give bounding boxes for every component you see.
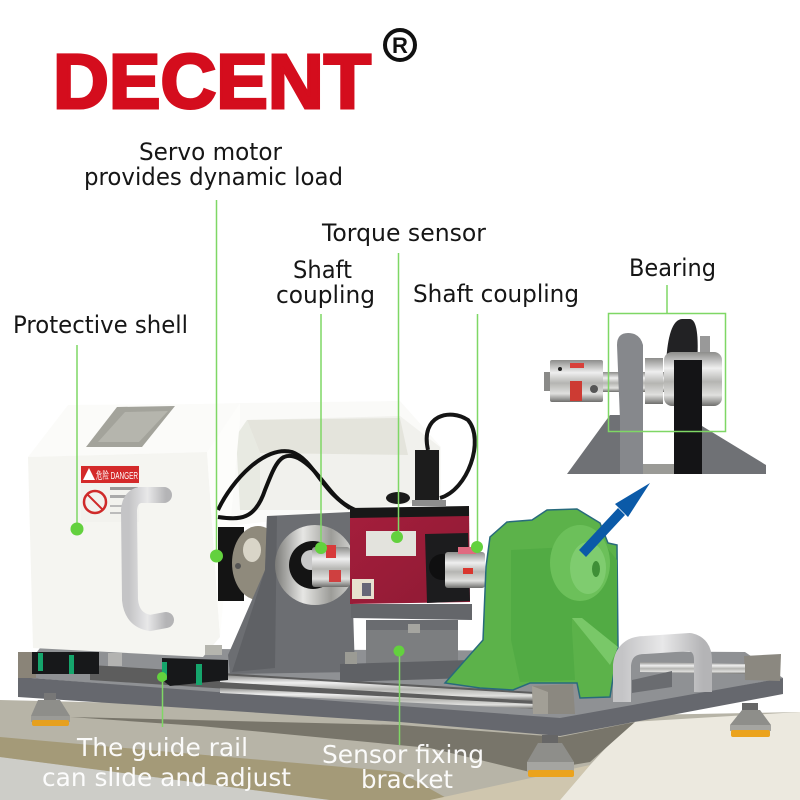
label: servo motor: Servo motor bbox=[139, 138, 282, 166]
flange bbox=[275, 525, 355, 605]
bearing leader and box bbox=[608, 285, 726, 432]
blue arrow bbox=[579, 483, 650, 557]
protective shell bbox=[28, 403, 240, 657]
torque sensor body bbox=[350, 506, 470, 604]
foot centre bbox=[527, 735, 574, 777]
cable plug bbox=[386, 415, 475, 506]
front handle bbox=[622, 642, 703, 702]
latch bbox=[205, 645, 222, 655]
floor / table surface bbox=[0, 700, 800, 800]
logo: DECENT: DECENT bbox=[53, 39, 371, 125]
specification label bbox=[366, 531, 416, 556]
label: sensor fixing: Sensor fixing bbox=[322, 740, 484, 769]
label: provides dynamic load: provides dynamic load bbox=[84, 163, 343, 191]
danger sign bbox=[81, 465, 139, 522]
foot right bbox=[730, 703, 771, 737]
highlighted green bearing block bbox=[445, 509, 618, 698]
slider right bbox=[162, 658, 228, 686]
QR label bbox=[352, 579, 374, 599]
label: bearing: Bearing bbox=[629, 254, 716, 282]
inset: bearing close-up bbox=[544, 319, 766, 474]
inset shaft bbox=[603, 372, 673, 392]
label: shaft: Shaft bbox=[293, 256, 352, 284]
sensor mount block bbox=[340, 604, 472, 682]
leader lines and markers bbox=[70, 200, 726, 745]
guide rail and sliders bbox=[32, 652, 535, 709]
sensor bracket leader bbox=[394, 646, 404, 745]
rear hood of protective shell bbox=[205, 401, 441, 527]
inset coupling bbox=[544, 360, 603, 402]
label: torque sensor: Torque sensor bbox=[321, 219, 486, 247]
label: bracket: bracket bbox=[361, 765, 453, 794]
labels bbox=[13, 138, 716, 794]
danger sign: 危险 DANGER bbox=[96, 469, 138, 482]
right coupling leader bbox=[471, 314, 483, 553]
nameplate bbox=[86, 406, 175, 447]
gray sensor-side bracket bbox=[228, 512, 355, 674]
protective shell leader bbox=[70, 345, 84, 536]
servo motor leader bbox=[210, 200, 223, 562]
shaft coupling left bbox=[312, 545, 350, 587]
levelling feet bbox=[31, 693, 771, 777]
inset base bbox=[567, 415, 632, 474]
guide rail leader bbox=[157, 672, 167, 727]
foot left bbox=[31, 693, 70, 726]
handle bbox=[129, 495, 166, 623]
right end block bbox=[744, 654, 781, 681]
shaft coupling right bbox=[445, 547, 485, 588]
inset bearing wheel bbox=[666, 319, 698, 365]
left coupling leader bbox=[315, 314, 327, 554]
torque sensor leader bbox=[391, 253, 403, 543]
label: shaft coupling right: Shaft coupling bbox=[413, 280, 579, 308]
base plate bbox=[18, 648, 783, 736]
rods on right bbox=[640, 662, 745, 674]
label: the guide rail: The guide rail bbox=[76, 733, 248, 762]
label: protective shell: Protective shell bbox=[13, 311, 188, 339]
rear cross guide block bbox=[18, 652, 36, 678]
inset plate bbox=[617, 333, 643, 474]
registered mark: R bbox=[392, 33, 408, 58]
inset strap bbox=[674, 360, 702, 474]
label: coupling: coupling bbox=[276, 281, 375, 309]
support post bbox=[108, 653, 122, 666]
slider left bbox=[32, 652, 99, 674]
servo motor bbox=[218, 526, 284, 601]
registered mark bbox=[385, 30, 415, 60]
label: can slide and adjust: can slide and adjust bbox=[42, 763, 291, 792]
front plate fittings bbox=[532, 671, 672, 714]
cables behind bracket bbox=[218, 451, 355, 518]
